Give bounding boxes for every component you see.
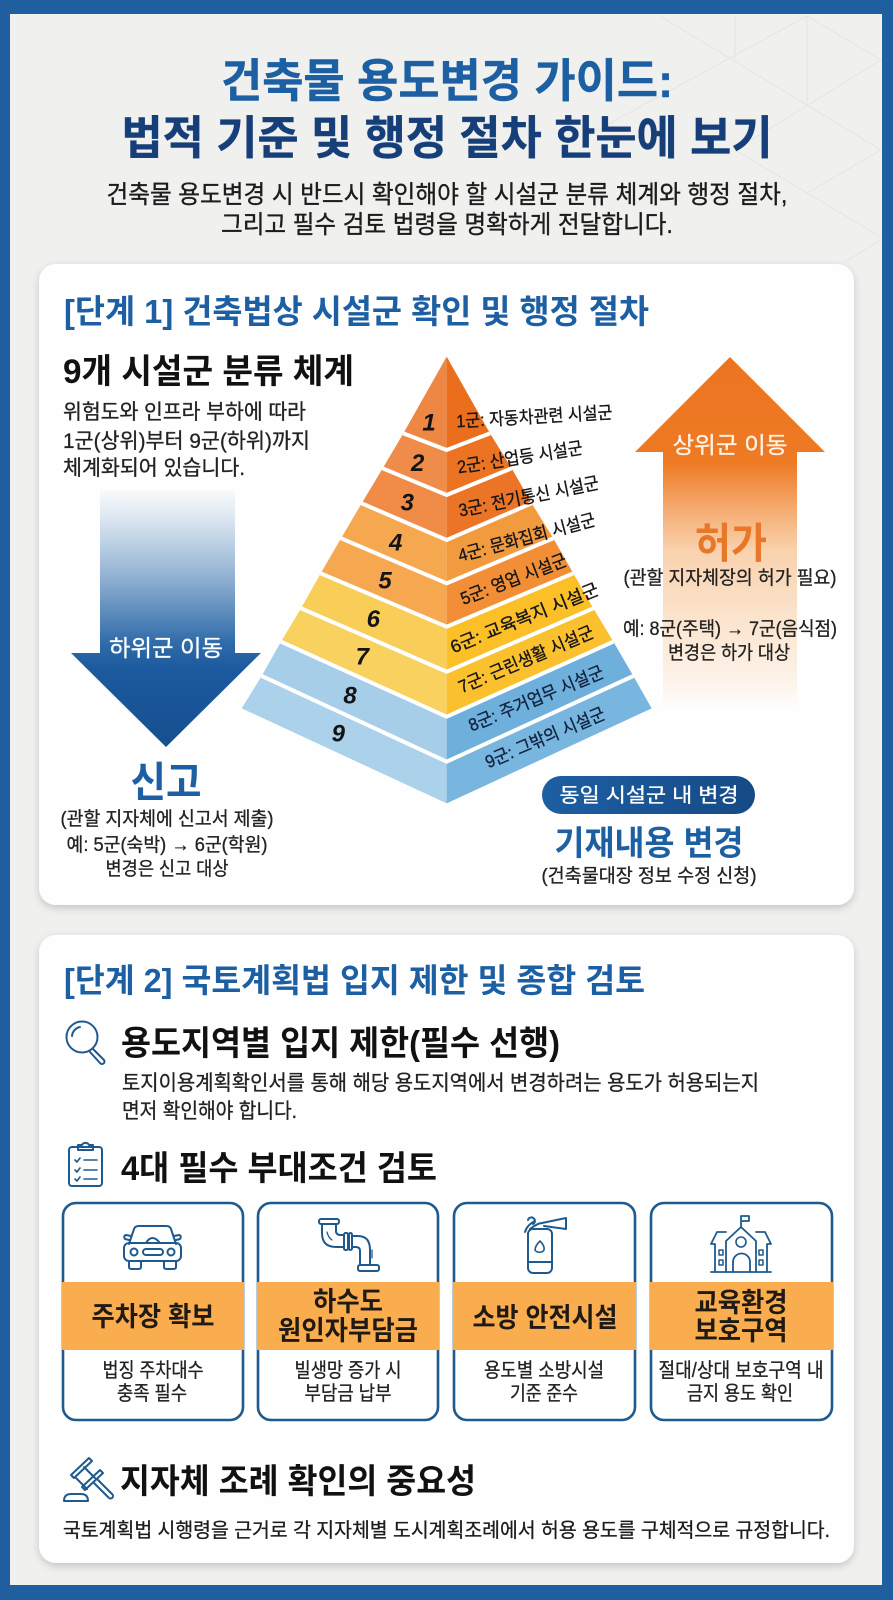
card: parking: 주차장 확보 xyxy=(92,1302,214,1332)
pyramid tier numbers xyxy=(332,409,436,747)
text block: report procedure: 신고 xyxy=(130,759,202,806)
card: fire safety xyxy=(453,1203,636,1420)
pyramid tier labels: 9군: 그밖의 시설군 xyxy=(482,703,608,772)
body text: zoning check: 토지이용계획확인서를 통해 해당 용도지역에서 변경하려는 용도가 허용되는지 xyxy=(122,1072,759,1095)
card: parking xyxy=(62,1203,244,1420)
pyramid tier numbers: 9 xyxy=(332,720,346,747)
card: sewer: 하수도 xyxy=(313,1287,383,1317)
text block: permit procedure: 예: 8군(주택) → 7군(음식점) xyxy=(623,618,837,640)
text block: permit procedure: 변경은 하가 대상 xyxy=(668,642,790,664)
card: parking: 법징 주차대수 xyxy=(102,1359,204,1382)
badge: change within same group: 동일 시설군 내 변경 xyxy=(560,784,738,807)
pyramid tier labels: 2군: 산업등 시설군 xyxy=(456,438,584,477)
card: education protection zone xyxy=(650,1203,833,1420)
card: parking: 충족 필수 xyxy=(117,1382,187,1405)
icon: school building xyxy=(711,1216,771,1272)
card: education protection zone: 금지 용도 확인 xyxy=(687,1382,793,1405)
pyramid tier numbers: 5 xyxy=(378,568,392,595)
subtitle: 그리고 필수 검토 법령을 명확하게 전달합니다. xyxy=(221,211,673,239)
card: education protection zone: 교육환경 xyxy=(694,1288,788,1318)
pyramid right face xyxy=(447,357,652,803)
title xyxy=(122,55,772,164)
text block: permit procedure: (관할 지자체장의 허가 필요) xyxy=(624,567,836,589)
text block: report procedure: 예: 5군(숙박) → 6군(학원) xyxy=(66,834,268,856)
icon: pipe xyxy=(319,1219,379,1271)
body text: hierarchy description: 1군(상위)부터 9군(하위)까지 xyxy=(63,430,310,453)
pyramid tier labels: 7군: 근린생활 시설군 xyxy=(455,622,597,697)
pyramid tier labels: 6군: 교육복지 시설군 xyxy=(447,579,602,657)
body text: zoning check: 면저 확인해야 합니다. xyxy=(122,1100,297,1123)
card: education protection zone: 절대/상대 보호구역 내 xyxy=(658,1359,824,1382)
body text: hierarchy description: 위험도와 인프라 부하에 따라 xyxy=(63,401,306,424)
panel: step 1 xyxy=(39,264,854,905)
pyramid tier labels xyxy=(447,402,613,772)
text block: report procedure xyxy=(60,759,274,880)
arrow: move up xyxy=(635,357,825,710)
pyramid left face xyxy=(242,357,447,803)
subtitle xyxy=(106,181,788,239)
heading: step 1: [단계 1] 건축법상 시설군 확인 및 행정 절차 xyxy=(64,293,649,330)
subtitle: 건축물 용도변경 시 반드시 확인해야 할 시설군 분류 체계와 행정 절차, xyxy=(106,181,788,209)
body text: hierarchy description: 체계화되어 있습니다. xyxy=(63,457,245,480)
text block: register amendment xyxy=(542,825,756,887)
pyramid tier labels: 3군: 전기통신 시설군 xyxy=(457,473,601,521)
icon: checklist clipboard xyxy=(69,1143,102,1186)
arrow: move down xyxy=(71,490,261,747)
pyramid tier numbers: 3 xyxy=(401,489,415,516)
pyramid tier numbers: 2 xyxy=(410,450,425,477)
badge: change within same group xyxy=(542,776,755,814)
card: fire safety: 용도별 소방시설 xyxy=(484,1359,604,1382)
pyramid chart: nine facility groups xyxy=(242,357,652,803)
text block: register amendment: (건축물대장 정보 수정 신청) xyxy=(542,865,756,887)
card: fire safety: 기준 준수 xyxy=(510,1382,578,1405)
pyramid tier labels: 5군: 영업 시설군 xyxy=(458,550,570,609)
subheading: local ordinances: 지자체 조례 확인의 중요성 xyxy=(120,1463,476,1501)
body text: zoning check xyxy=(122,1072,759,1123)
text block: permit procedure xyxy=(623,520,837,664)
pyramid tier numbers: 8 xyxy=(343,683,357,710)
subheading: four conditions: 4대 필수 부대조건 검토 xyxy=(121,1150,437,1188)
arrow: move down: 하위군 이동 xyxy=(109,635,223,661)
text block: permit procedure: 허가 xyxy=(695,520,767,567)
title: 건축물 용도변경 가이드: xyxy=(221,55,673,107)
subheading: zoning restrictions: 용도지역별 입지 제한(필수 선행) xyxy=(121,1025,560,1063)
text block: report procedure: (관할 지자체에 신고서 제출) xyxy=(60,808,274,830)
title: 법적 기준 및 행정 절차 한눈에 보기 xyxy=(122,112,772,164)
pyramid tier numbers: 6 xyxy=(367,606,381,633)
pyramid tier numbers: 1 xyxy=(422,409,436,436)
card: sewer: 원인자부담금 xyxy=(278,1316,418,1346)
card: sewer: 빌생망 증가 시 xyxy=(294,1359,402,1382)
text block: register amendment: 기재내용 변경 xyxy=(554,825,744,863)
pyramid tier labels: 4군: 문화집회 시설군 xyxy=(456,510,598,566)
icon: gavel xyxy=(64,1458,113,1501)
card: fire safety: 소방 안전시설 xyxy=(472,1303,618,1333)
subheading: nine facility groups: 9개 시설군 분류 체계 xyxy=(63,353,354,391)
body text: local ordinances: 국토계획법 시행령을 근거로 각 지자체별 도시계획조례에서 허용 용도를 구체적으로 규정합니다. xyxy=(63,1519,830,1542)
body text: hierarchy description xyxy=(63,401,310,480)
pyramid tier numbers: 4 xyxy=(388,529,402,556)
pyramid tier labels: 8군: 주거업무 시설군 xyxy=(466,662,607,735)
icon: magnifying glass xyxy=(66,1022,105,1064)
icon: fire extinguisher xyxy=(525,1217,566,1273)
card: sewer: 부담금 납부 xyxy=(304,1382,392,1405)
pyramid tier labels: 1군: 자동차관련 시설군 xyxy=(456,402,613,431)
text block: report procedure: 변경은 신고 대상 xyxy=(106,858,228,880)
heading: step 2: [단계 2] 국토계획법 입지 제한 및 종합 검토 xyxy=(64,962,645,999)
card: sewer xyxy=(257,1203,439,1420)
icon: car xyxy=(124,1226,181,1269)
card: education protection zone: 보호구역 xyxy=(694,1316,788,1346)
arrow: move up: 상위군 이동 xyxy=(672,432,788,458)
pyramid tier numbers: 7 xyxy=(356,644,371,671)
panel: step 2 xyxy=(39,935,854,1563)
